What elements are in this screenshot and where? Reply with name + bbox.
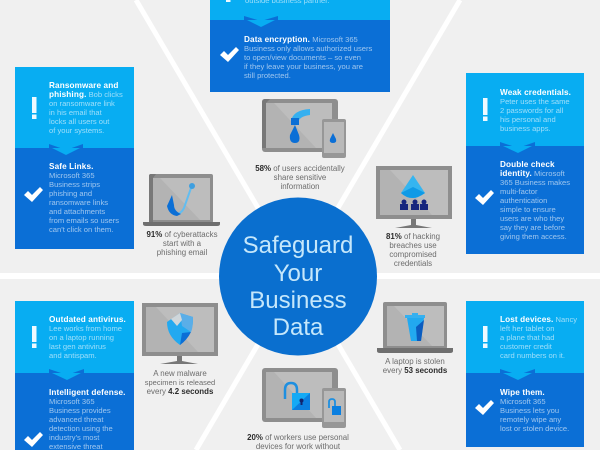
- panel: data encryption: Business only allows authorized users: [244, 44, 373, 53]
- caption: 20%: [247, 433, 349, 450]
- caption: malware: specimen is released: [145, 378, 215, 387]
- panel: weak credentials: 365 Business makes: [500, 178, 570, 187]
- caption: 91%: [146, 230, 218, 257]
- panel: ransomware and phishing: Ransomware and: [49, 81, 118, 90]
- panel: lost devices: [466, 301, 584, 447]
- panel: outdated antivirus: last gen antivirus: [49, 342, 106, 351]
- panel: ransomware and phishing: of your systems.: [49, 126, 104, 135]
- panel: outdated antivirus: detection using the: [49, 424, 113, 433]
- panel: ransomware and phishing: Microsoft 365: [49, 171, 95, 180]
- caption: 91%: 91% of cyberattacks: [146, 230, 218, 239]
- icon: tablet and phone with dripping data: [262, 99, 346, 158]
- caption: 58%: 58% of users accidentally: [255, 164, 345, 173]
- caption: 53 seconds: [383, 357, 448, 375]
- panel: ransomware and phishing: phishing. Bob clicks: [49, 90, 123, 99]
- caption: 58%: [255, 164, 345, 191]
- panel: lost devices: Lost devices. Nancy: [500, 315, 577, 324]
- panel: weak credentials: Peter uses the same: [500, 97, 570, 106]
- panel: weak credentials: identity. Microsoft: [500, 169, 566, 178]
- caption: 58%: share sensitive: [274, 173, 327, 182]
- icon: monitor with cracked shield: [142, 303, 218, 364]
- icon: tablet and phone with open locks: [262, 368, 346, 428]
- caption: malware: [145, 369, 215, 396]
- panel: weak credentials: 2 passwords for all: [500, 106, 564, 115]
- central title circle: Data: [273, 314, 324, 341]
- panel: weak credentials: authentication: [500, 196, 547, 205]
- panel: data encryption: Data encryption. Microsoft 365: [244, 35, 358, 44]
- panel: outdated antivirus: industry's most: [49, 433, 100, 442]
- central title circle: Your: [274, 260, 322, 287]
- central title circle: Business: [249, 287, 347, 314]
- central title circle: Safeguard: [243, 232, 353, 259]
- caption: 81%: compromised: [389, 250, 437, 259]
- panel: outdated antivirus: Intelligent defense.: [49, 388, 126, 397]
- panel: ransomware and phishing: ransomware links: [49, 198, 108, 207]
- icon: monitor with compromised credentials: [376, 166, 452, 228]
- caption: malware: A new malware: [153, 369, 207, 378]
- panel: lost devices: remotely wipe any: [500, 415, 561, 424]
- caption: 58%: information: [280, 182, 320, 191]
- caption: 53 seconds: every 53 seconds: [383, 366, 448, 375]
- panel: lost devices: Wipe them.: [500, 388, 545, 397]
- panel: weak credentials: business apps.: [500, 124, 551, 133]
- panel: outdated antivirus: Outdated antivirus.: [49, 315, 126, 324]
- panel: outdated antivirus: Microsoft 365: [49, 397, 95, 406]
- panel: ransomware and phishing: phishing and: [49, 189, 92, 198]
- panel: ransomware and phishing: [15, 67, 134, 249]
- caption: 81%: 81% of hacking: [386, 232, 440, 241]
- panel: outdated antivirus: Business provides: [49, 406, 111, 415]
- caption: 53 seconds: A laptop is stolen: [385, 357, 445, 366]
- caption: 81%: credentials: [394, 259, 432, 268]
- panel: lost devices: left her tablet on: [500, 324, 554, 333]
- panel: lost devices: Microsoft 365: [500, 397, 546, 406]
- panel: weak credentials: his personal and: [500, 115, 556, 124]
- panel: weak credentials: [466, 73, 584, 254]
- panel: lost devices: a plane that had: [500, 333, 554, 342]
- panel: data encryption: if they leave your business, you are: [244, 62, 363, 71]
- panel: ransomware and phishing: in his email that: [49, 108, 103, 117]
- panel: data encryption: to open/view documents – so even: [244, 53, 361, 62]
- panel: ransomware and phishing: on ransomware link: [49, 99, 115, 108]
- panel: ransomware and phishing: and attachments: [49, 207, 105, 216]
- panel: data encryption: still protected.: [244, 71, 291, 80]
- caption: 91%: phishing email: [157, 248, 207, 257]
- panel: weak credentials: giving them access.: [500, 232, 567, 241]
- caption: malware: every 4.2 seconds: [147, 387, 214, 396]
- panel: data encryption: [210, 0, 390, 92]
- icon: laptop with phishing hook: [143, 174, 220, 226]
- central title circle: [219, 198, 377, 356]
- panel: lost devices: customer credit: [500, 342, 553, 351]
- caption: 91%: start with a: [163, 239, 202, 248]
- caption: 20%: 20% of workers use personal: [247, 433, 349, 442]
- panel: outdated antivirus: advanced threat: [49, 415, 104, 424]
- panel: ransomware and phishing: can't click on them.: [49, 225, 113, 234]
- panel: ransomware and phishing: locks all users out: [49, 117, 110, 126]
- panel: lost devices: card numbers on it.: [500, 351, 565, 360]
- panel: outdated antivirus: on a laptop running: [49, 333, 114, 342]
- panel: weak credentials: simple to ensure: [500, 205, 556, 214]
- panel: ransomware and phishing: Safe Links.: [49, 162, 94, 171]
- panel: weak credentials: users are who they: [500, 214, 564, 223]
- panel: outdated antivirus: and antispam.: [49, 351, 97, 360]
- panel: ransomware and phishing: from emails so users: [49, 216, 119, 225]
- panel: outdated antivirus: [15, 301, 134, 450]
- panel: weak credentials: Double check: [500, 160, 555, 169]
- caption: 81%: breaches use: [389, 241, 437, 250]
- icon: laptop with trash can: [377, 302, 453, 353]
- panel: lost devices: Business lets you: [500, 406, 559, 415]
- panel: outdated antivirus: Lee works from home: [49, 324, 122, 333]
- panel: weak credentials: say they are before: [500, 223, 565, 232]
- panel: ransomware and phishing: Business strips: [49, 180, 100, 189]
- panel: lost devices: lost or stolen device.: [500, 424, 569, 433]
- panel: weak credentials: multi-factor: [500, 187, 538, 196]
- panel: weak credentials: Weak credentials.: [500, 88, 571, 97]
- caption: 81%: [386, 232, 440, 268]
